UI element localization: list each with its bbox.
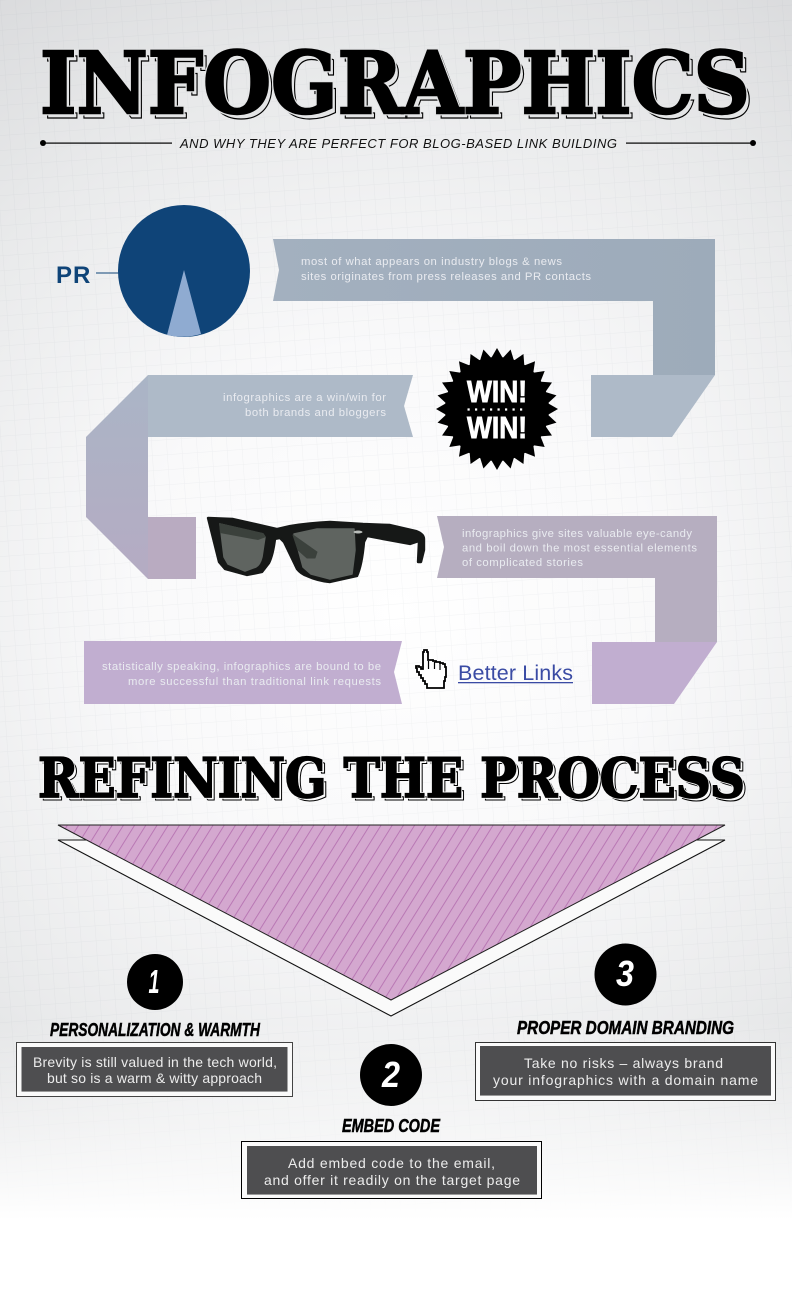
ribbon 3: eye-candy: infographics give sites valuable eye-candy	[462, 528, 692, 540]
win win starburst badge: WIN!	[467, 374, 527, 409]
icon: hand cursor	[416, 650, 446, 688]
ribbon 2: win/win: both brands and bloggers	[245, 407, 386, 419]
ribbon 3: eye-candy: of complicated stories	[462, 557, 583, 569]
PR pie chart: PR	[56, 262, 91, 289]
step 3: 3	[616, 953, 634, 994]
win win starburst badge	[427, 339, 567, 479]
title: INFOGRAPHICS	[40, 34, 750, 134]
link: better links: Better Links	[458, 661, 573, 685]
ribbon 3: eye-candy: and boil down the most essential elements	[462, 542, 697, 554]
step 2: 2	[381, 1054, 400, 1095]
step 2: Add embed code to the email,	[288, 1155, 495, 1171]
win win starburst badge: WIN!	[467, 410, 527, 445]
title: INFOGRAPHICS	[40, 34, 750, 134]
step 3	[476, 944, 776, 1100]
subtitle with rules	[40, 136, 756, 151]
step 2: and offer it readily on the target page	[264, 1172, 520, 1188]
ribbon 3: eye-candy	[437, 516, 717, 704]
PR pie chart	[56, 205, 250, 337]
ribbon 2: win/win: infographics are a win/win for	[223, 392, 386, 404]
step 1: PERSONALIZATION & WARMTH	[50, 1020, 261, 1040]
ribbon 1: press releases: most of what appears on industry blogs & news	[301, 256, 562, 268]
step 1: Brevity is still valued in the tech world,	[33, 1054, 277, 1070]
step 3: PROPER DOMAIN BRANDING	[517, 1018, 734, 1038]
ribbon 1: press releases	[273, 239, 715, 437]
step 3: Take no risks – always brand	[524, 1055, 723, 1071]
ribbon 4: link requests: statistically speaking, infographics are bound to be	[102, 661, 381, 673]
icon: sunglasses	[208, 518, 424, 582]
step 1: but so is a warm & witty approach	[47, 1070, 262, 1086]
ribbon 4: link requests	[84, 641, 402, 704]
step 2: EMBED CODE	[342, 1116, 441, 1136]
step 2	[242, 1044, 542, 1198]
ribbon 4: link requests: more successful than traditional link requests	[128, 676, 381, 688]
step 1: 1	[148, 963, 160, 1000]
subtitle with rules: AND WHY THEY ARE PERFECT FOR BLOG-BASED LINK BUILDING	[179, 136, 617, 151]
ribbon 1: press releases: sites originates from press releases and PR contacts	[301, 271, 591, 283]
step 1	[16, 954, 292, 1096]
striped funnel triangle	[58, 825, 725, 1016]
ribbon 2: win/win	[86, 375, 413, 579]
step 3: your infographics with a domain name	[493, 1072, 758, 1088]
